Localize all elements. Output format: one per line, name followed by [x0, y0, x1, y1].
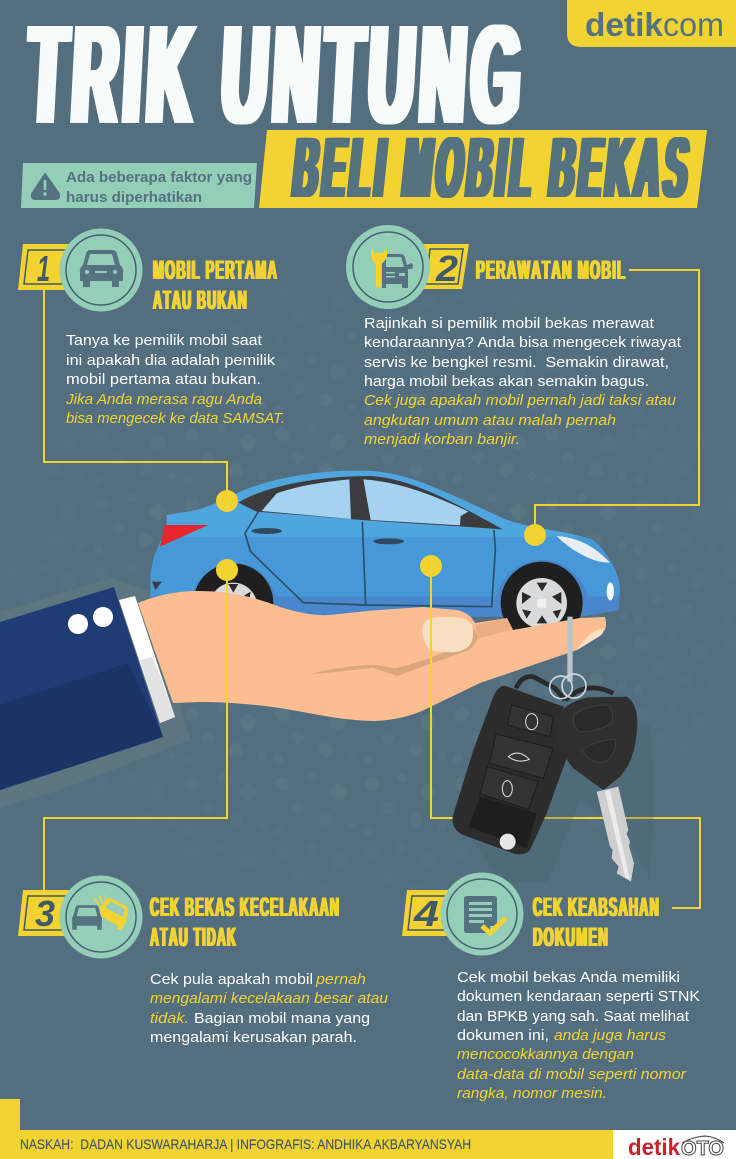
body text 4: mencocokkannya dengan: [457, 1046, 634, 1063]
panel: step 4: [402, 872, 700, 1102]
subtitle: BELI MOBIL BEKAS: [289, 120, 697, 216]
rear window: [262, 479, 351, 519]
step flag 3: 3: [35, 893, 55, 934]
body text 2: angkutan umum atau malah pernah: [364, 412, 616, 429]
rear wheel: [189, 563, 278, 643]
panel: step 2: [346, 225, 682, 448]
step flag 1: [18, 244, 72, 290]
body text 2: servis ke bengkel resmi. Semakin dirawat,: [364, 354, 669, 371]
fob glyphs: [502, 714, 538, 797]
credits: NASKAH: DADAN KUSWARAHARJA | INFOGRAFIS: ANDHIKA AKBARYANSYAH: [20, 1136, 471, 1152]
key head loop: [565, 688, 613, 700]
body text 1: mobil pertama atau bukan.: [66, 371, 261, 388]
key shadow: [470, 720, 655, 882]
body text 4: dokumen ini,: [457, 1027, 549, 1044]
illustration: hand: [0, 587, 606, 790]
buttons: [68, 607, 113, 634]
body text 3: Cek pula apakah mobil: [150, 971, 313, 988]
body text 4: rangka, nomor mesin.: [457, 1085, 607, 1102]
heading 1: MOBIL PERTAMA: [153, 255, 278, 285]
connector lines: [44, 270, 700, 908]
footer: [0, 1099, 736, 1159]
body text 3: tidak.: [150, 1010, 189, 1027]
pointer dots: [216, 490, 546, 581]
illustration: car: [150, 470, 620, 630]
body text 4: dan BPKB yang sah. Saat melihat: [457, 1008, 690, 1025]
key head: [554, 697, 637, 790]
car body: [150, 471, 620, 617]
icon: crashed car: [94, 895, 133, 931]
rear reflector: [152, 582, 162, 590]
step flag 3: [18, 890, 72, 936]
body text 4: [457, 969, 700, 1102]
heading 3: CEK BEKAS KECELAKAAN: [150, 892, 340, 922]
panel: step 3: [18, 876, 389, 1046]
key rings: [550, 674, 586, 699]
body text 2: kendaraannya? Anda bisa mengecek riwayat: [364, 334, 682, 351]
sleeve shadow: [0, 578, 190, 808]
icon circle 2: [346, 225, 430, 309]
heading 3: ATAU TIDAK: [150, 922, 237, 952]
finger shade: [475, 618, 513, 638]
fob loop: [516, 676, 565, 700]
side windows frame: [238, 476, 503, 529]
body text 4: data-data di mobil seperti nomor: [457, 1066, 687, 1083]
body text 2: Cek juga apakah mobil pernah jadi taksi atau: [364, 392, 677, 409]
heading 1: ATAU BUKAN: [153, 285, 248, 315]
icon circle 3: [60, 876, 142, 958]
background dot pattern: [0, 250, 736, 930]
tail light: [160, 525, 208, 547]
headlight: [557, 536, 610, 563]
fob buttons: [480, 705, 553, 809]
panel: step 1: [18, 228, 285, 427]
body text 4: anda juga harus: [554, 1027, 667, 1044]
heading 1: [152, 255, 278, 315]
body text 4: Cek mobil bekas Anda memiliki: [457, 969, 680, 986]
body text 3: mengalami kerusakan parah.: [150, 1029, 357, 1046]
step flag 4: 4: [413, 893, 439, 934]
body text 1: Jika Anda merasa ragu Anda: [65, 391, 262, 408]
fog lamp: [607, 582, 614, 600]
body text 2: menjadi korban banjir.: [364, 431, 520, 448]
body text 4: dokumen kendaraan seperti STNK: [457, 988, 700, 1005]
front wheel: [493, 560, 591, 644]
palm: [138, 591, 606, 721]
palm crease: [310, 628, 478, 676]
body text 2: [364, 315, 682, 448]
step flag 2: [415, 244, 469, 289]
thumb nail: [422, 617, 473, 652]
icon: warning: [32, 174, 59, 199]
body text 2: harga mobil bekas akan semakin bagus.: [364, 373, 649, 390]
heading 4: CEK KEABSAHAN: [533, 892, 660, 922]
body text 3: mengalami kecelakaan besar atau: [150, 990, 389, 1007]
door handles: [251, 528, 404, 544]
body text 3: [150, 971, 389, 1046]
door lines: [245, 512, 495, 607]
heading 2: PERAWATAN MOBIL: [476, 255, 626, 285]
front window: [363, 479, 468, 525]
heading 3: [149, 892, 340, 952]
note tag: [21, 163, 257, 208]
body text 1: Tanya ke pemilik mobil saat: [66, 332, 263, 349]
body text 2: Rajinkah si pemilik mobil bekas merawat: [364, 315, 655, 332]
key ring rod: [567, 617, 573, 682]
flip key fob: [453, 686, 566, 854]
body text 1: ini apakah dia adalah pemilik: [66, 352, 276, 369]
subtitle banner: [259, 130, 707, 208]
step flag 4: [402, 890, 456, 936]
sleeve lower shade: [0, 663, 163, 790]
logo: detikOTO: [613, 1130, 736, 1159]
key head buttons: [573, 705, 616, 762]
heading 4: DOKUMEN: [533, 922, 609, 952]
icon circle 1: [60, 228, 142, 312]
note tag: harus diperhatikan: [66, 189, 202, 206]
body text 1: bisa mengecek ke data SAMSAT.: [66, 410, 285, 427]
sleeve: [0, 587, 163, 790]
line over hand: [227, 576, 431, 720]
fob metal button: [500, 834, 516, 850]
fingertip: [577, 628, 604, 650]
note tag: Ada beberapa faktor yang: [66, 169, 252, 186]
lower body panel: [143, 537, 627, 617]
icon circle 4: [440, 872, 524, 956]
logo: detikcom: com: [663, 6, 724, 43]
step flag 1: 1: [37, 248, 50, 289]
icon: dark car: [72, 905, 102, 930]
body text 3: pernah: [315, 971, 366, 988]
step flag 2: 2: [435, 248, 458, 289]
body text 3: Bagian mobil mana yang: [194, 1010, 370, 1027]
body text 1: [65, 332, 285, 427]
key blade: [597, 787, 634, 882]
illustration: car keys: [453, 617, 637, 882]
logo: detikcom: [567, 0, 736, 47]
cuff shade: [140, 657, 175, 723]
heading 4: [532, 892, 660, 952]
logo: detikcom: detik: [585, 6, 664, 43]
cuff: [119, 596, 175, 723]
